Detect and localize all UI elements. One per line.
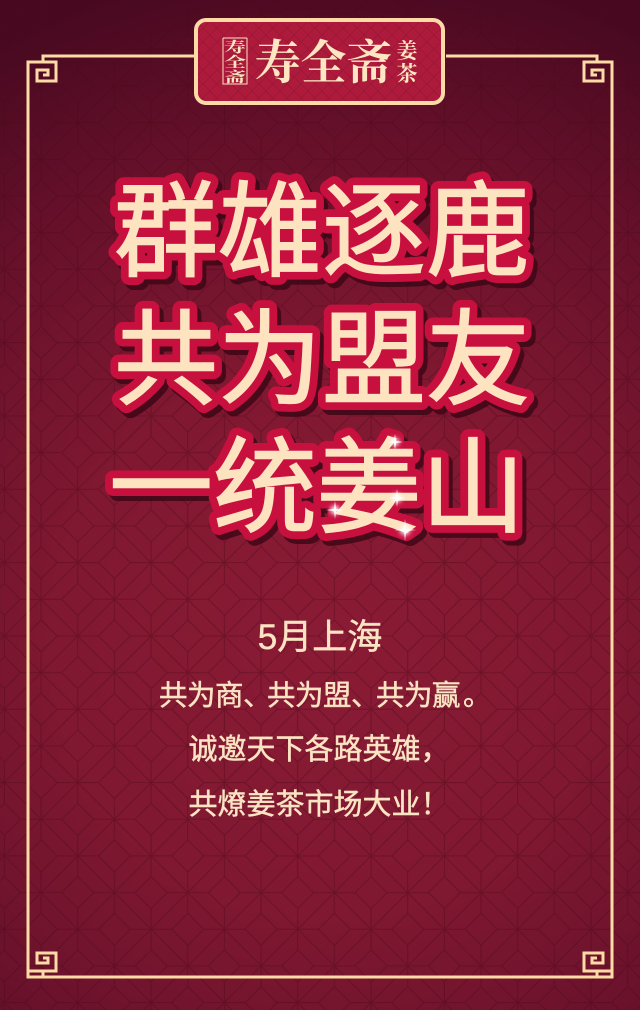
logo seal <box>223 36 247 87</box>
icon: top-right corner spiral <box>584 62 612 81</box>
logo tea label: 姜 <box>396 35 418 65</box>
logo tea label: 茶 <box>396 58 418 88</box>
body copy <box>159 618 492 821</box>
icon: bottom-left corner spiral <box>28 953 56 971</box>
line three: 共燎姜茶市场大业！ <box>188 788 450 821</box>
line one: 共为商、共为盟、共为赢。 <box>159 680 492 712</box>
logo seal: 寿 <box>224 36 246 57</box>
icon: bottom-right corner spiral <box>584 953 612 971</box>
headline <box>109 147 534 559</box>
logo tea label <box>396 35 418 88</box>
logo seal: 斋 <box>224 66 246 87</box>
sparkles <box>326 434 416 541</box>
headline line 2: 共为盟友 <box>118 280 534 431</box>
headline line 3: 一统姜山 <box>109 403 525 554</box>
headline line 2: 共为盟友 <box>114 275 530 426</box>
logo seal: 全 <box>224 51 247 72</box>
headline line 1: 群雄逐鹿 <box>114 147 530 298</box>
headline line 2: 共为盟友 <box>114 275 530 426</box>
line two: 诚邀天下各路英雄， <box>188 733 450 766</box>
headline line 3: 一统姜山 <box>109 403 525 554</box>
date and place: 5月上海 <box>258 618 382 657</box>
headline line 3: 一统姜山 <box>113 408 529 559</box>
logo wordmark: 寿全斋 <box>255 26 392 93</box>
headline line 1: 群雄逐鹿 <box>114 147 530 298</box>
headline line 1: 群雄逐鹿 <box>118 152 534 303</box>
logo plaque <box>196 20 443 103</box>
icon: top-left corner spiral <box>28 62 56 81</box>
